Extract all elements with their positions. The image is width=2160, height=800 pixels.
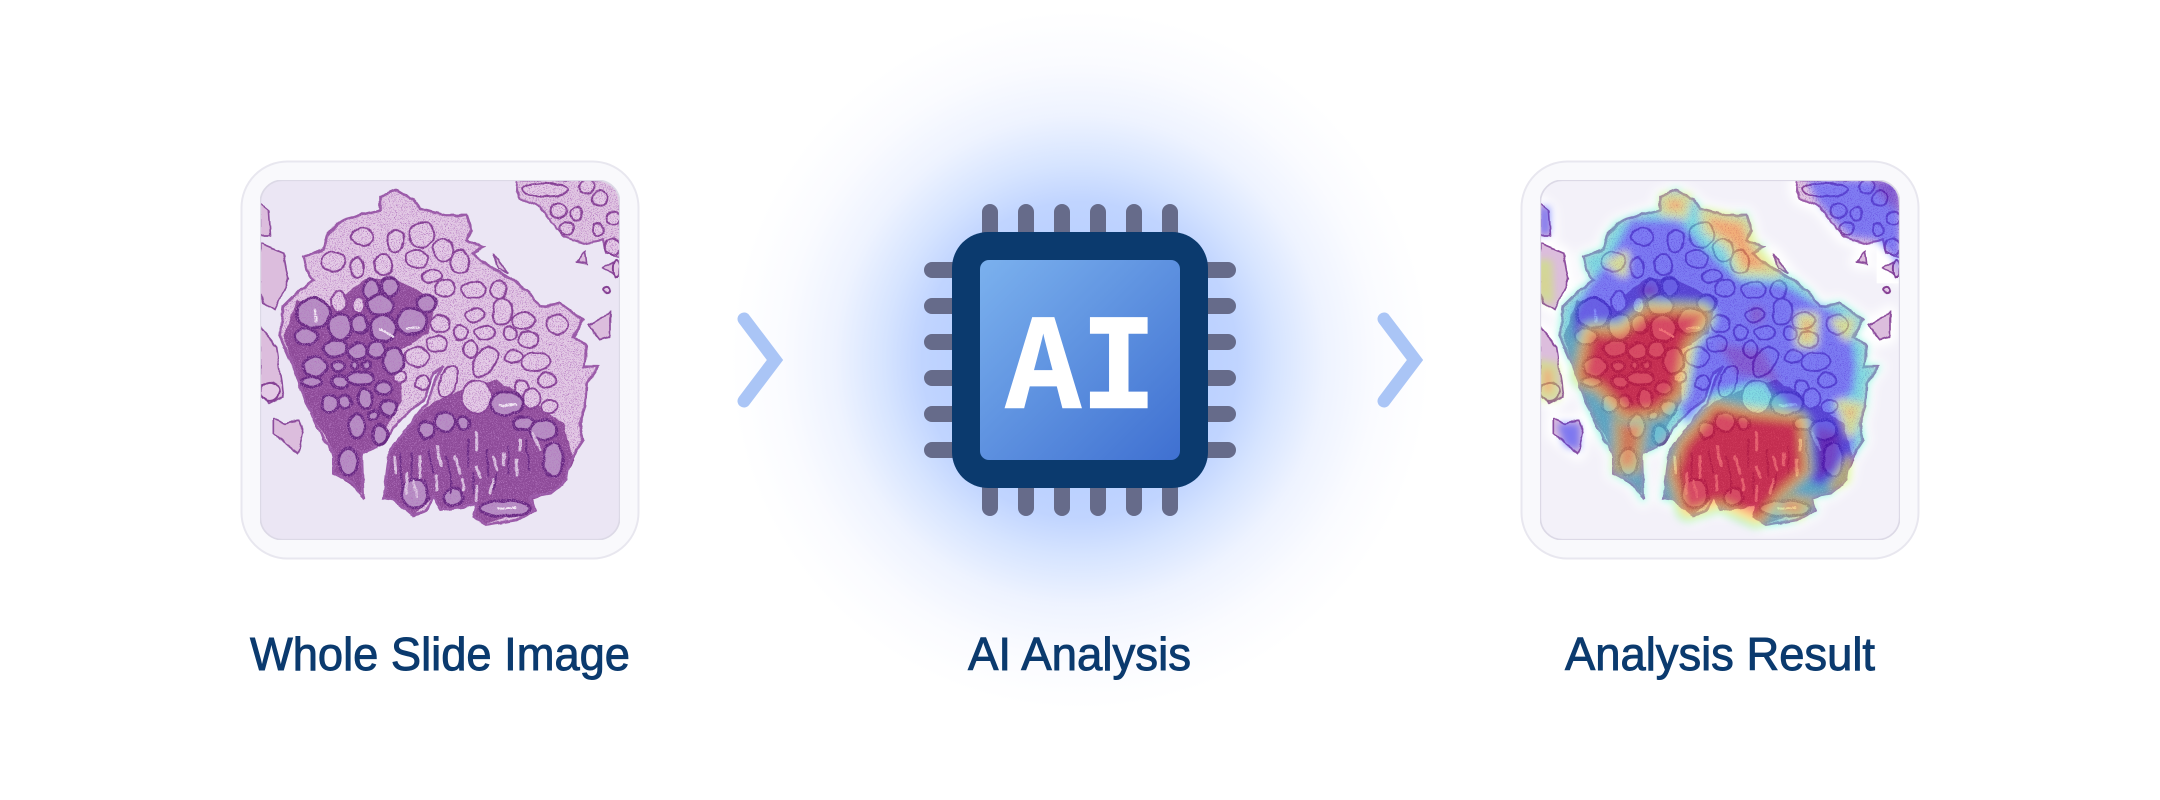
chip pins: [932, 212, 1228, 508]
chip body: [952, 232, 1208, 488]
arrow: to analysis result: [1384, 319, 1415, 401]
chip core: [980, 260, 1180, 460]
card frame: [242, 162, 638, 558]
label: whole slide image: Whole Slide Image: [250, 628, 630, 680]
icon: AI chip: [932, 212, 1228, 508]
background glow: [730, 10, 1430, 710]
label: analysis result: Analysis Result: [1565, 628, 1875, 680]
heatmap slide image: [1540, 180, 1900, 540]
arrow: to AI analysis: [744, 319, 775, 401]
tissue slide image: [260, 180, 620, 540]
panel: whole slide image: [242, 162, 638, 558]
chip text: AI: [1006, 294, 1156, 448]
panel: analysis result: [1522, 162, 1918, 558]
card frame: [1522, 162, 1918, 558]
label: AI analysis: AI Analysis: [968, 628, 1191, 680]
